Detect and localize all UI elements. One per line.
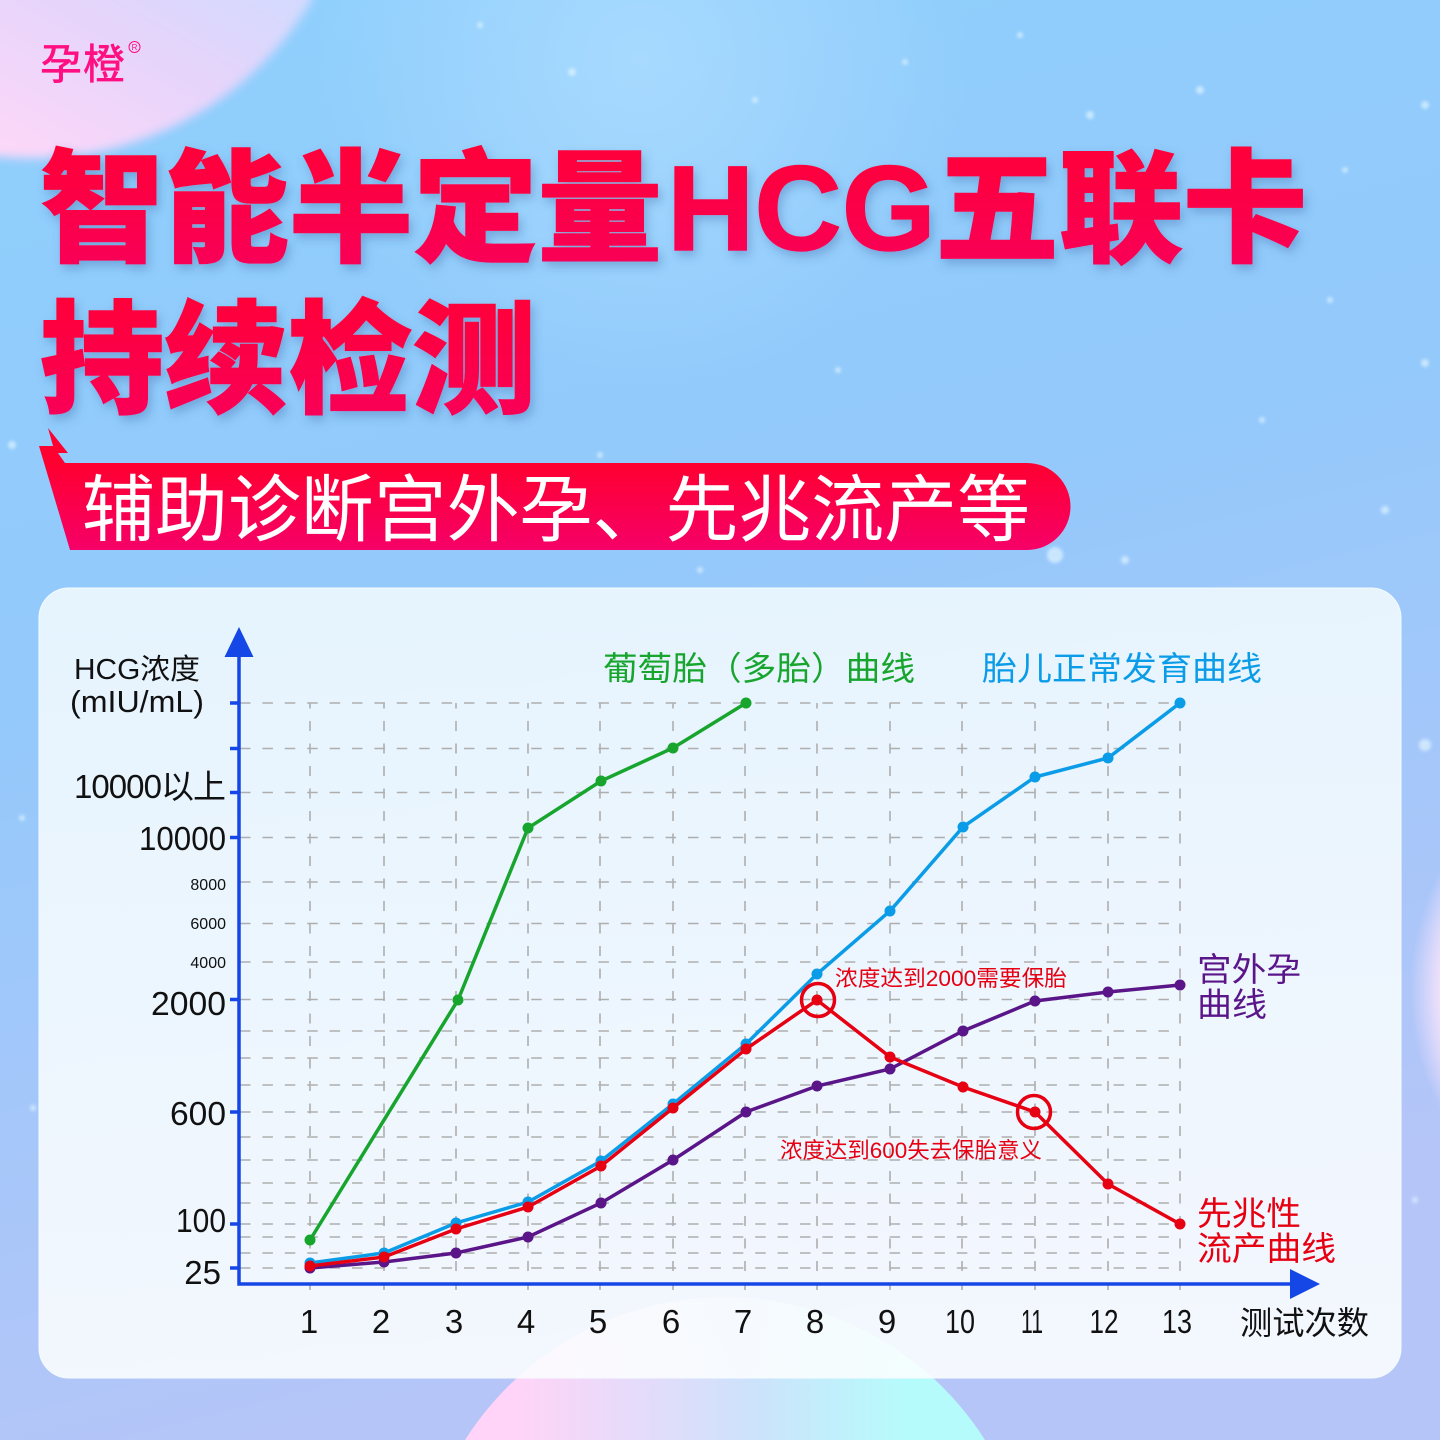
callouts: 浓度达到600失去保胎意义 <box>780 1138 1042 1163</box>
x axis labels: 4 <box>517 1303 535 1340</box>
banner <box>39 428 1070 557</box>
legend labels: 曲线 <box>1197 978 1267 1026</box>
x axis labels: 1 <box>300 1303 318 1340</box>
x axis labels: 2 <box>372 1303 390 1340</box>
y axis labels: 8000 <box>190 877 226 894</box>
x axis labels: 10 <box>945 1303 975 1340</box>
y axis labels: 10000 <box>139 820 226 857</box>
y axis title: (mIU/mL) <box>70 684 204 719</box>
x axis labels: 9 <box>878 1303 896 1340</box>
series: hydatidiform mole curve (green) <box>304 698 752 1246</box>
callouts <box>780 966 1067 1163</box>
x axis labels: 8 <box>806 1303 824 1340</box>
title line 1: 智能半定量 <box>40 111 662 288</box>
axes <box>224 627 1320 1299</box>
x axis labels: 3 <box>445 1303 463 1340</box>
panel: chart card <box>39 588 1401 1378</box>
series: ectopic curve (purple) <box>304 980 1186 1274</box>
title line 1: HCG <box>667 140 936 276</box>
y axis labels: 25 <box>184 1254 221 1291</box>
legend labels: 先兆性 <box>1197 1187 1301 1235</box>
x axis labels: 5 <box>589 1303 607 1340</box>
legend labels <box>603 642 1336 1270</box>
grid <box>240 703 1180 1290</box>
y axis labels: 4000 <box>190 955 226 972</box>
legend labels: 流产曲线 <box>1197 1222 1336 1270</box>
x axis title: 测试次数 <box>1240 1305 1369 1341</box>
callouts: 浓度达到2000需要保胎 <box>835 966 1067 991</box>
y axis title <box>70 653 204 719</box>
y axis labels <box>74 768 226 1291</box>
x axis labels: 7 <box>734 1303 752 1340</box>
y axis labels: 2000 <box>151 985 226 1022</box>
x axis labels: 6 <box>662 1303 680 1340</box>
logo: 孕橙 <box>40 31 125 92</box>
x axis labels: 13 <box>1162 1303 1192 1340</box>
logo: R <box>132 43 138 52</box>
y axis labels: 6000 <box>190 916 226 933</box>
y axis labels: 600 <box>170 1095 226 1132</box>
x axis labels: 12 <box>1090 1303 1118 1340</box>
x axis labels <box>300 1303 1192 1340</box>
title line 2: 持续检测 <box>40 262 536 439</box>
x axis labels: 11 <box>1021 1303 1043 1340</box>
legend labels: 宫外孕 <box>1197 943 1301 991</box>
series: threatened miscarriage curve (red) <box>304 984 1186 1272</box>
y axis labels: 100 <box>176 1202 226 1239</box>
y axis title: HCG浓度 <box>74 653 200 686</box>
y axis labels: 10000以上 <box>74 768 226 805</box>
legend labels: 胎儿正常发育曲线 <box>982 642 1262 690</box>
title line 1 <box>40 111 1307 288</box>
banner text: 辅助诊断宫外孕、先兆流产等 <box>82 451 1030 557</box>
series: normal curve (blue) <box>304 698 1186 1268</box>
legend labels: 葡萄胎（多胎）曲线 <box>603 642 915 690</box>
title line 1: 五联卡 <box>935 111 1307 288</box>
